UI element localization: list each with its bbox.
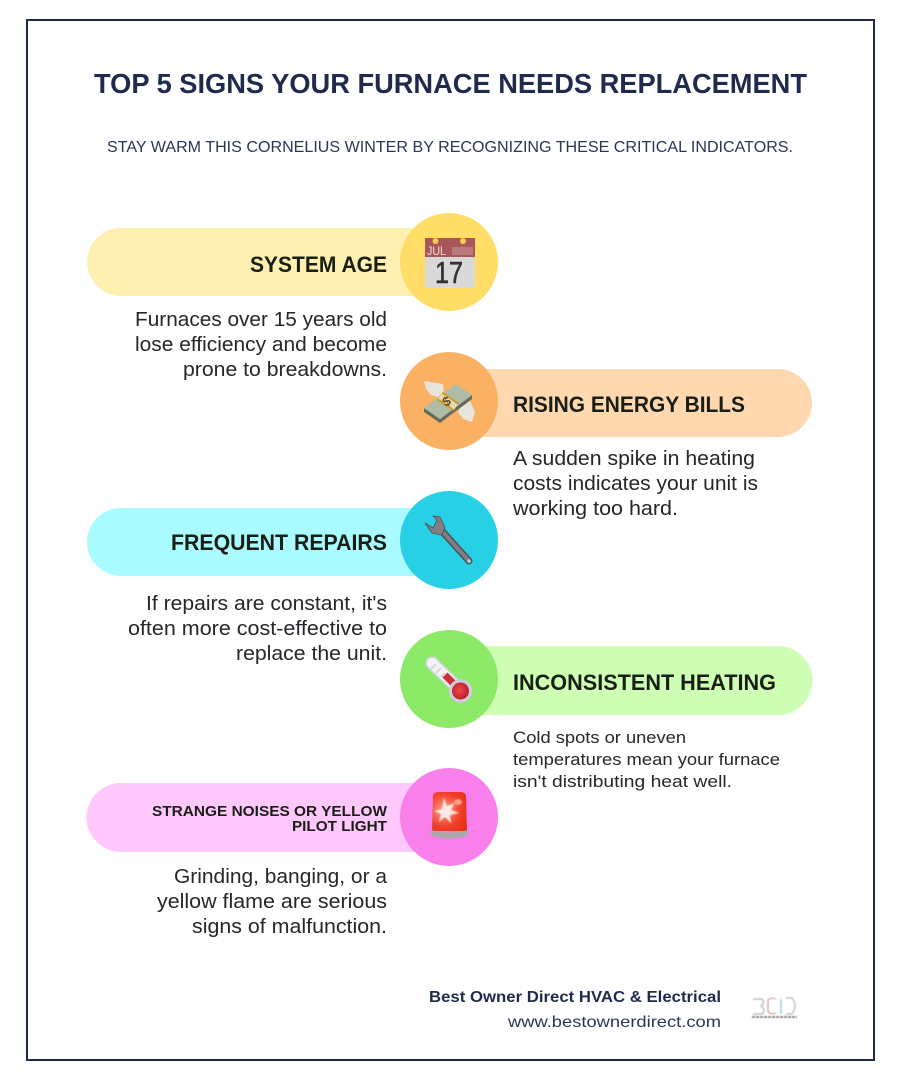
text: rising energy bills description: working too hard. <box>512 498 678 520</box>
footer company name: Best Owner Direct HVAC & Electrical <box>429 989 721 1006</box>
panel: frequent repairs <box>87 491 498 665</box>
heading: strange noises: STRANGE NOISES OR YELLOW <box>152 803 388 820</box>
icon circle: calendar: JUL <box>427 244 446 258</box>
panel: rising energy bills <box>400 352 812 520</box>
icon circle: thermometer <box>400 630 498 728</box>
text: rising energy bills description: costs indicates your unit is <box>513 473 758 495</box>
pill: inconsistent heating <box>460 646 813 715</box>
pill: system age <box>87 228 440 296</box>
heading: strange noises: PILOT LIGHT <box>292 818 387 835</box>
heading: frequent repairs: FREQUENT REPAIRS <box>171 530 387 555</box>
icon circle: siren <box>400 768 498 866</box>
text: system age description: lose efficiency and become <box>135 334 387 356</box>
heading: system age: SYSTEM AGE <box>250 252 387 277</box>
text: inconsistent heating description <box>513 728 780 791</box>
icon circle: flying money: $ <box>440 393 454 410</box>
text: frequent repairs description: If repairs are constant, it's <box>146 593 387 615</box>
text: inconsistent heating description: isn't distributing heat well. <box>513 772 732 791</box>
logo <box>752 998 797 1017</box>
text: system age description: Furnaces over 15 years old <box>135 309 387 331</box>
panel: inconsistent heating <box>400 630 813 791</box>
text: rising energy bills description <box>512 448 758 520</box>
footer website: www.bestownerdirect.com <box>507 1014 721 1031</box>
text: frequent repairs description <box>128 593 387 665</box>
text: system age description <box>135 309 387 381</box>
pill: rising energy bills <box>460 369 812 437</box>
panel: system age <box>87 213 498 381</box>
panel: strange noises <box>87 768 498 938</box>
heading: rising energy bills: RISING ENERGY BILLS <box>513 392 745 417</box>
text: strange noises description: signs of malfunction. <box>192 916 387 938</box>
text: inconsistent heating description: temperatures mean your furnace <box>513 750 780 769</box>
icon circle: calendar: 17 <box>435 255 463 290</box>
text: strange noises description: yellow flame are serious <box>157 891 387 913</box>
text: frequent repairs description: often more cost-effective to <box>128 618 387 640</box>
text: rising energy bills description: A sudden spike in heating <box>513 448 755 470</box>
pill: frequent repairs <box>87 508 440 576</box>
text: strange noises description: Grinding, banging, or a <box>174 866 388 888</box>
text: frequent repairs description: replace the unit. <box>236 643 387 665</box>
subtitle: STAY WARM THIS CORNELIUS WINTER BY RECOGNIZING THESE CRITICAL INDICATORS. <box>107 139 793 156</box>
icon circle: wrench <box>400 491 498 589</box>
icon circle: calendar <box>400 213 498 311</box>
icon circle: flying money <box>400 352 498 450</box>
heading: strange noises <box>152 803 388 835</box>
heading: inconsistent heating: INCONSISTENT HEATING <box>513 670 776 695</box>
text: inconsistent heating description: Cold spots or uneven <box>513 728 686 747</box>
text: strange noises description <box>157 866 388 938</box>
pill: strange noises <box>87 783 440 852</box>
title: TOP 5 SIGNS YOUR FURNACE NEEDS REPLACEMENT <box>94 68 807 99</box>
text: system age description: prone to breakdowns. <box>183 359 387 381</box>
